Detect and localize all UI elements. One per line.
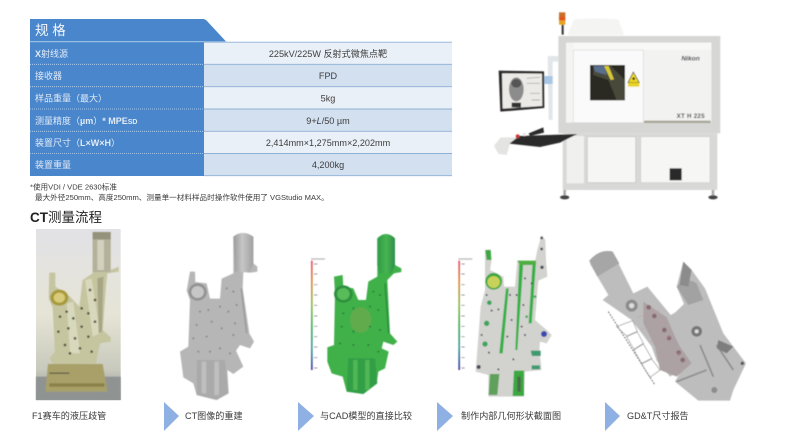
footnote	[30, 182, 329, 202]
model name: XT H 225	[677, 113, 705, 120]
table left column	[30, 42, 204, 176]
top housing	[567, 18, 624, 35]
holes	[192, 287, 238, 354]
row labels	[35, 48, 137, 170]
step 3: CAD comparison	[311, 234, 401, 394]
row values: 225kV/225W 反射式微焦点靶	[269, 48, 387, 59]
arrow 1	[164, 402, 179, 431]
Nikon logo: Nikon	[681, 56, 700, 63]
row values: FPD	[319, 71, 338, 81]
monitor arm	[548, 56, 558, 120]
step caption: CT图像的重建: CT图像的重建	[185, 410, 243, 421]
monitor	[499, 71, 544, 112]
row labels: 装置重量	[35, 159, 71, 170]
arrow 2	[298, 402, 314, 431]
control desk	[494, 127, 577, 155]
heading: CT测量流程: CT测量流程	[30, 210, 102, 225]
footnote: 最大外径250mm、高度250mm、测量单一材料样品时操作软件使用了 VGStudio MAX。	[35, 192, 329, 202]
row labels: 测量精度（µm）* MPESD	[35, 115, 137, 126]
lower cabinet	[563, 133, 717, 190]
step caption: F1赛车的液压歧管: F1赛车的液压歧管	[32, 410, 106, 421]
step caption: 与CAD模型的直接比较: 与CAD模型的直接比较	[320, 410, 412, 421]
row values: 5kg	[321, 94, 335, 104]
holes	[339, 291, 381, 353]
green part	[327, 234, 401, 394]
heading tab: 规格	[30, 19, 226, 42]
table right rows	[30, 42, 452, 176]
brass plaque	[45, 364, 107, 392]
row values: 9+L/50 µm	[306, 116, 350, 126]
machine photo: XT H 225	[494, 12, 720, 199]
callout boxes	[617, 321, 660, 377]
arrow 4	[605, 402, 620, 431]
heading tab: 规格: 规 格	[35, 23, 66, 38]
row labels: 样品重量（最大）	[35, 92, 107, 104]
feet	[560, 190, 718, 199]
main cabinet	[558, 36, 720, 133]
row values: 4,200kg	[312, 160, 344, 170]
step caption: 制作内部几何形状截面图: 制作内部几何形状截面图	[461, 410, 561, 421]
section body	[476, 235, 552, 397]
radiation label	[628, 72, 639, 87]
row labels: X射线源	[35, 48, 68, 59]
beacon light	[559, 12, 565, 35]
color scale	[311, 258, 325, 370]
footnote: *使用VDI / VDE 2630标准	[30, 182, 117, 192]
window	[590, 65, 625, 100]
step 5: GD&T report	[589, 251, 746, 401]
row values: 2,414mm×1,275mm×2,202mm	[266, 138, 390, 148]
right panel	[644, 50, 711, 121]
step 4: cross-section	[458, 235, 552, 397]
row labels: 装置尺寸（L×W×H）	[35, 137, 120, 148]
row values	[266, 48, 390, 170]
step 1 photo: F1 hydraulic manifold	[36, 229, 121, 400]
section holes	[477, 237, 544, 370]
step 2: CT reconstruction	[180, 233, 257, 400]
color scale	[458, 258, 472, 370]
manifold body	[49, 232, 119, 365]
arrow 3	[437, 402, 453, 431]
gray part	[589, 251, 746, 401]
holes	[57, 289, 96, 355]
spec table	[30, 19, 452, 176]
row labels: 接收器	[35, 70, 62, 81]
step caption: GD&T尺寸报告: GD&T尺寸报告	[627, 410, 689, 421]
door	[573, 50, 643, 123]
